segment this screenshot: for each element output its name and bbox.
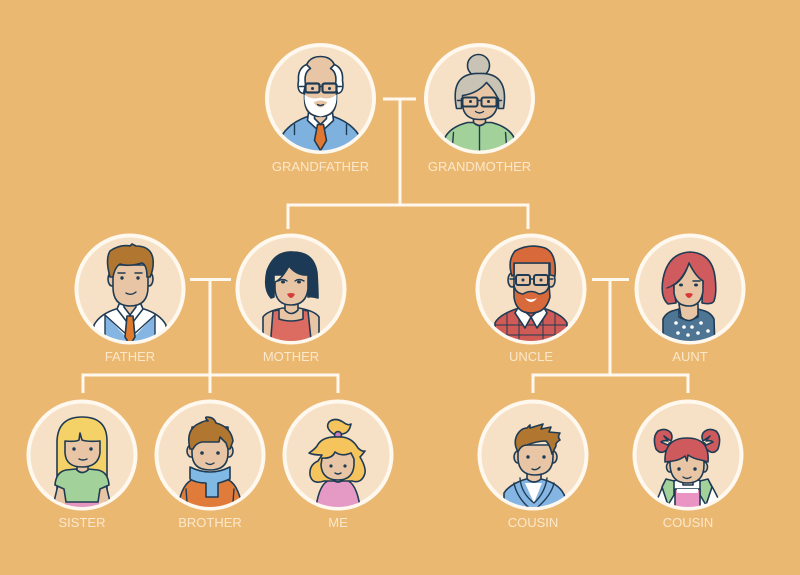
label: cousin boy: COUSIN (508, 515, 558, 530)
portrait: cousin girl (634, 402, 742, 515)
label: father: FATHER (105, 349, 155, 364)
label: me: ME (328, 515, 348, 530)
portrait: grandfather (267, 45, 374, 158)
portrait: aunt (636, 236, 744, 349)
label: aunt: AUNT (672, 349, 708, 364)
portrait: mother (238, 236, 344, 349)
label: brother: BROTHER (178, 515, 242, 530)
portrait: sister (28, 402, 136, 515)
label: grandmother: GRANDMOTHER (428, 159, 531, 174)
label: grandfather: GRANDFATHER (272, 159, 369, 174)
portrait: uncle (478, 236, 584, 349)
label: mother: MOTHER (263, 349, 319, 364)
label: cousin girl: COUSIN (663, 515, 713, 530)
portrait: me (284, 402, 392, 515)
portrait: cousin boy (480, 402, 586, 515)
family tree connector lines (83, 99, 688, 393)
portrait: brother (156, 402, 264, 515)
label: uncle: UNCLE (509, 349, 553, 364)
portrait: grandmother (426, 45, 533, 158)
portrait: father (76, 236, 184, 349)
label: sister: SISTER (59, 515, 105, 530)
